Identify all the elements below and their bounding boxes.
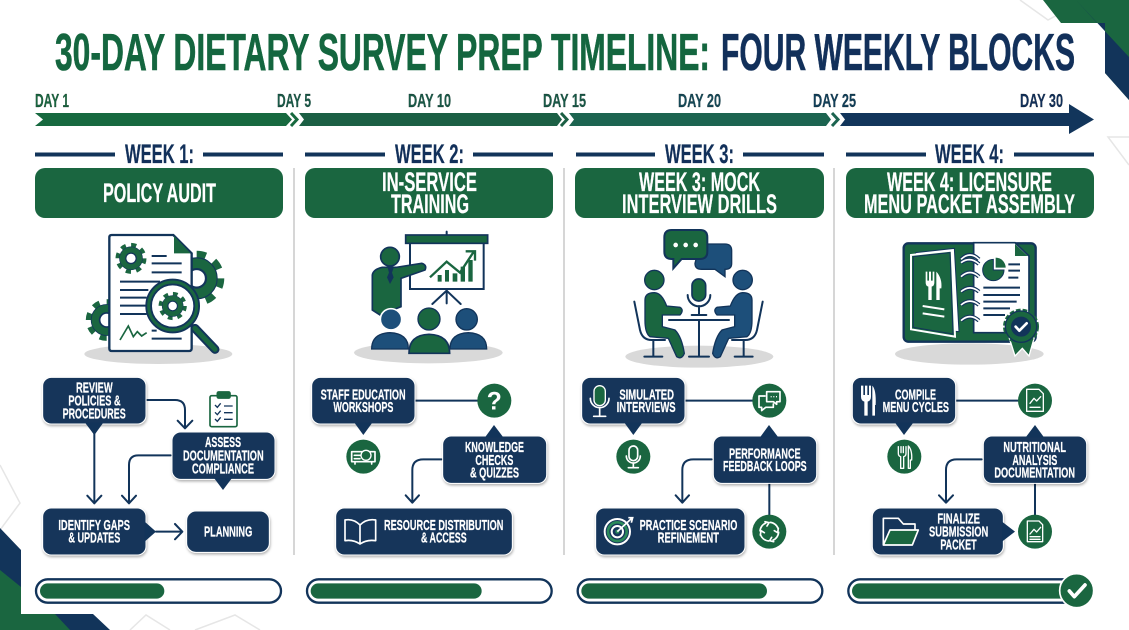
panel: week 2 <box>305 139 553 603</box>
step: practice scenario: PRACTICE SCENARIO <box>640 517 738 534</box>
timeline: day labels and arrow: DAY 15 <box>543 90 586 111</box>
icon: presenter and audience <box>354 232 503 363</box>
icon: report <box>1018 515 1052 549</box>
step: review policies: PROCEDURES <box>63 406 126 423</box>
timeline: day labels and arrow: DAY 30 <box>1020 90 1063 111</box>
icon: document audit <box>84 235 232 364</box>
icon: question mark <box>477 384 511 418</box>
step: finalize submission: FINALIZE <box>937 510 980 527</box>
step: resource distribution: RESOURCE DISTRIBUTION <box>384 517 503 534</box>
progress bar: week 2 <box>307 579 552 603</box>
step: knowledge checks <box>443 425 547 483</box>
banner: in-service training <box>305 167 553 219</box>
step: nutritional analysis: NUTRITIONAL <box>1003 439 1066 456</box>
timeline: day labels and arrow: DAY 25 <box>813 90 856 111</box>
step: compile menu cycles: COMPILE <box>895 386 936 403</box>
step: planning: PLANNING <box>204 524 252 541</box>
step: simulated interviews: SIMULATED <box>619 386 674 403</box>
step: knowledge checks: KNOWLEDGE <box>465 439 524 456</box>
step: identify gaps <box>43 508 156 555</box>
heading: week 2: WEEK 2: <box>395 139 464 169</box>
step: finalize submission: PACKET <box>940 536 977 553</box>
step: staff education <box>312 377 415 435</box>
step: practice scenario: REFINEMENT <box>658 530 719 547</box>
timeline: day labels and arrow <box>35 90 1094 134</box>
icon: interview at table <box>625 230 773 368</box>
step: compile menu cycles <box>852 377 956 435</box>
step: review policies <box>43 377 146 435</box>
icon: fork and knife <box>887 440 921 474</box>
flow arrows <box>87 400 192 539</box>
icon: question mark: ? <box>487 388 502 415</box>
step: planning <box>187 511 269 552</box>
column dividers <box>294 168 834 555</box>
step: knowledge checks: & QUIZZES <box>470 465 519 482</box>
step: review policies: POLICIES & <box>68 392 121 409</box>
step: assess documentation: ASSESS <box>205 434 241 451</box>
step: resource distribution <box>336 508 512 555</box>
step: simulated interviews <box>582 377 685 435</box>
banner: licensure menu packet <box>846 167 1094 219</box>
banner: mock interview drills <box>575 167 824 219</box>
step: finalize submission: SUBMISSION <box>929 523 988 540</box>
step: simulated interviews: INTERVIEWS <box>617 399 676 416</box>
flow connectors <box>406 401 478 503</box>
heading: week 3: WEEK 3: <box>665 139 734 169</box>
timeline: day labels and arrow: DAY 10 <box>408 90 451 111</box>
step: finalize submission <box>872 508 1015 555</box>
step: assess documentation: COMPLIANCE <box>192 460 254 477</box>
icon: chat bubbles <box>752 384 786 418</box>
step: resource distribution: & ACCESS <box>421 530 467 547</box>
progress bar: week 1 <box>36 579 281 603</box>
flow connectors <box>676 401 769 515</box>
title: 30-DAY DIETARY SURVEY PREP TIMELINE: <box>55 24 710 82</box>
progress bar: week 3 <box>578 579 822 603</box>
step: nutritional analysis: DOCUMENTATION <box>994 465 1075 482</box>
step: performance feedback: FEEDBACK LOOPS <box>723 458 807 475</box>
icon: analysis document <box>1018 384 1052 418</box>
step: compile menu cycles: MENU CYCLES <box>883 399 949 416</box>
step: nutritional analysis <box>983 425 1087 483</box>
corner accent: top right <box>1043 0 1129 100</box>
step: performance feedback <box>713 425 817 483</box>
step: assess documentation: DOCUMENTATION <box>183 448 264 465</box>
progress bar: week 4 complete <box>848 574 1094 608</box>
corner accent: bottom left <box>0 528 110 630</box>
step: performance feedback: PERFORMANCE <box>729 445 801 462</box>
panel: week 1 <box>35 139 283 603</box>
panel: week 3 <box>575 139 824 603</box>
banner: mock interview drills: INTERVIEW DRILLS <box>622 189 777 219</box>
step: practice scenario <box>596 508 745 555</box>
banner: policy audit: POLICY AUDIT <box>103 178 216 208</box>
step: staff education: STAFF EDUCATION <box>321 386 406 403</box>
timeline: day labels and arrow: DAY 1 <box>35 90 69 111</box>
step: nutritional analysis: ANALYSIS <box>1012 452 1057 469</box>
step: staff education: WORKSHOPS <box>333 399 393 416</box>
icon: menu binder and badge <box>895 243 1044 365</box>
icon: projector <box>346 440 380 474</box>
heading: week 1: WEEK 1: <box>125 139 194 169</box>
flow connectors <box>939 401 1035 515</box>
panel: week 4 <box>846 139 1094 608</box>
step: identify gaps: IDENTIFY GAPS <box>58 517 130 534</box>
icon: microphone <box>616 440 650 474</box>
heading: week 4: WEEK 4: <box>935 139 1004 169</box>
banner: in-service training: TRAINING <box>391 189 469 219</box>
timeline: day labels and arrow: DAY 20 <box>678 90 721 111</box>
icon: cycle arrows <box>752 515 786 549</box>
step: review policies: REVIEW <box>76 380 113 397</box>
banner: in-service training: IN-SERVICE <box>382 167 477 197</box>
banner: policy audit <box>35 168 283 218</box>
banner: mock interview drills: WEEK 3: MOCK <box>639 167 760 197</box>
icon: clipboard checklist <box>210 392 237 427</box>
step: assess documentation <box>172 432 275 490</box>
timeline: day labels and arrow: DAY 5 <box>277 90 311 111</box>
step: identify gaps: & UPDATES <box>68 530 120 547</box>
step: knowledge checks: CHECKS <box>475 452 513 469</box>
